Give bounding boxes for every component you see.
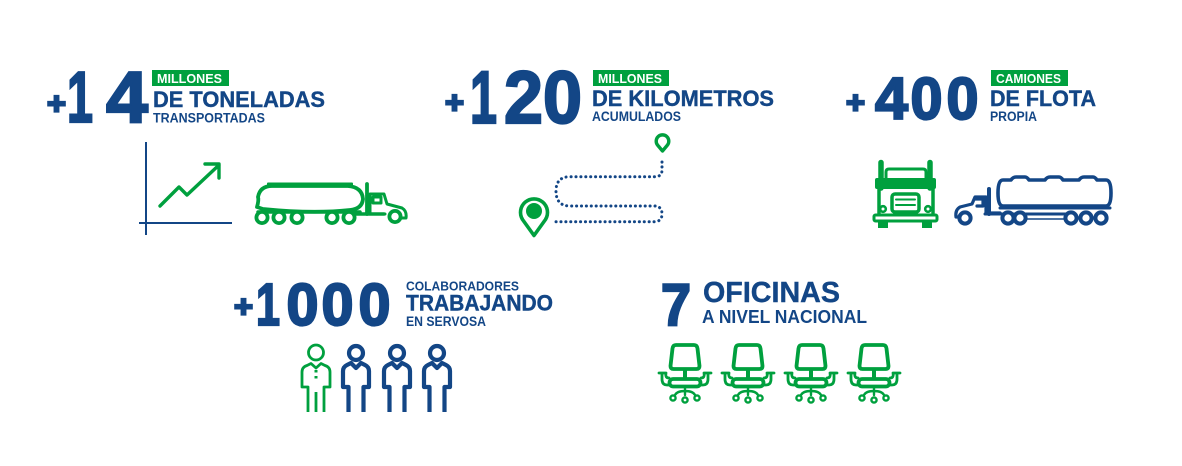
icon: small map pin — [656, 135, 669, 151]
text: transportadas: TRANSPORTADAS — [153, 110, 265, 126]
icon: office chair — [848, 345, 900, 403]
heading: +120: 2 — [504, 56, 543, 139]
heading: +1000: 0 — [358, 272, 390, 338]
text: de toneladas: DE TONELADAS — [153, 87, 325, 112]
heading: +120: + — [445, 85, 464, 120]
heading: +400: 0 — [946, 66, 978, 132]
icon: green tanker truck — [256, 184, 406, 223]
heading: +14: 4 — [106, 58, 148, 138]
heading: +1000 — [234, 272, 390, 338]
heading: +400 — [846, 66, 978, 132]
icon: blue person — [384, 346, 410, 412]
icon: truck front view — [874, 162, 937, 228]
heading: +14 — [47, 58, 148, 138]
heading: +1000: + — [234, 289, 253, 324]
icon: growth chart — [139, 142, 232, 235]
heading: +400: + — [846, 85, 865, 120]
icon: office chair — [785, 345, 837, 403]
icon: dotted route — [556, 162, 662, 222]
text: acumulados: ACUMULADOS — [592, 109, 681, 124]
heading: +14: 1 — [67, 58, 93, 138]
heading: +1000: 1 — [256, 272, 280, 338]
stat: 120 million kilometers — [445, 56, 774, 236]
icon: office chair — [722, 345, 774, 403]
stat: 1000 collaborators — [234, 272, 553, 412]
heading: +1000: 0 — [286, 272, 318, 338]
stat: 7 offices — [659, 272, 900, 403]
heading: +14: + — [47, 86, 66, 121]
text: colaboradores: COLABORADORES — [406, 280, 519, 294]
text: de kilometros: DE KILOMETROS — [592, 86, 774, 111]
heading: 7: 7 — [661, 272, 691, 338]
heading: +400: 0 — [910, 66, 942, 132]
text: oficinas: OFICINAS — [703, 277, 840, 309]
badge: millones: MILLONES — [157, 72, 222, 86]
icon: office chair — [659, 345, 711, 403]
text: trabajando: TRABAJANDO — [406, 290, 553, 316]
text: de flota: DE FLOTA — [990, 86, 1096, 111]
badge: millones: MILLONES — [598, 72, 662, 86]
heading: +1000: 0 — [322, 272, 354, 338]
heading: +120 — [445, 56, 582, 139]
icon: large map pin — [520, 199, 548, 236]
text: propia: PROPIA — [990, 109, 1037, 124]
icon: blue person — [343, 346, 369, 412]
heading: +120: 1 — [470, 56, 497, 139]
heading: +120: 0 — [543, 56, 582, 139]
text: a nivel nacional: A NIVEL NACIONAL — [702, 307, 867, 327]
text: en servosa: EN SERVOSA — [406, 314, 486, 329]
badge: camiones: CAMIONES — [996, 72, 1061, 86]
icon: blue tanker truck — [956, 177, 1111, 224]
stat: 14 million tons transported — [47, 58, 406, 235]
heading: +400: 4 — [875, 66, 908, 132]
stat: 400 trucks — [846, 66, 1111, 228]
icon: blue person — [424, 346, 450, 412]
icon: green person — [302, 345, 330, 412]
